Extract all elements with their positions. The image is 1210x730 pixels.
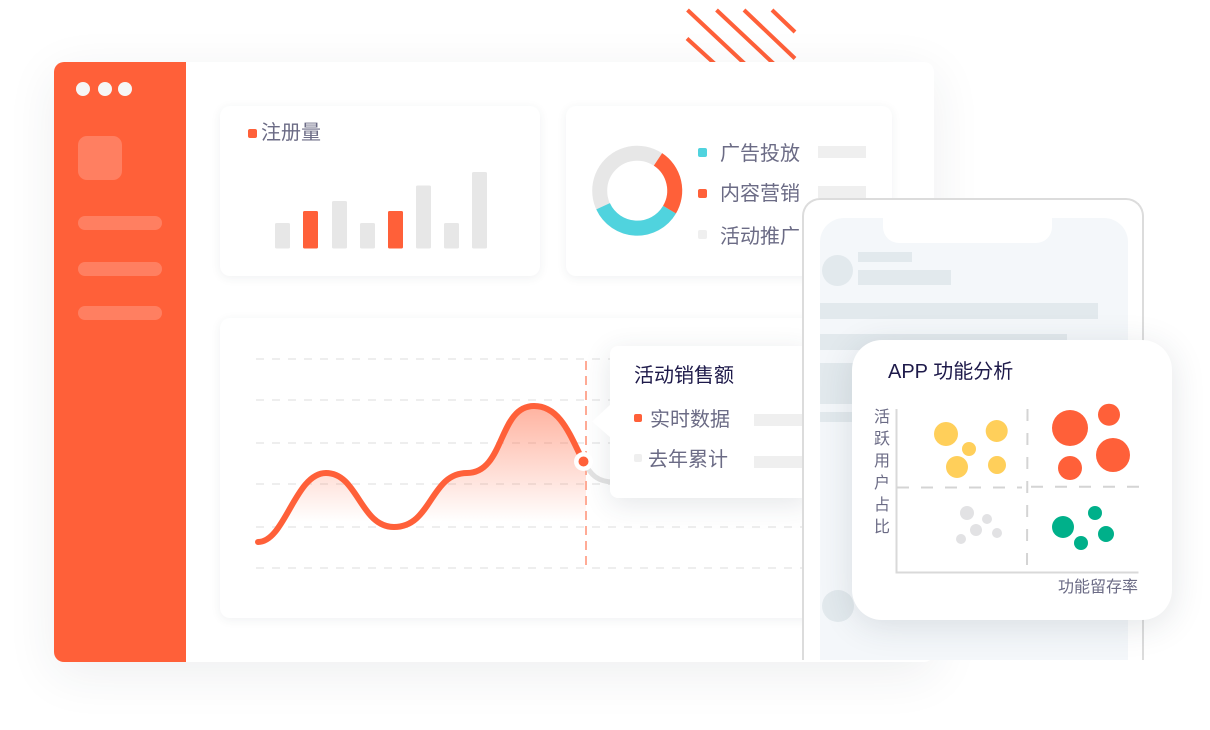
y axis label: 户 — [874, 475, 890, 492]
heading: app feature analysis: APP 功能分析 — [888, 361, 1013, 383]
data point marker — [574, 452, 590, 471]
legend: ad placement: 广告投放 — [720, 143, 800, 165]
panel: sidebar — [54, 62, 186, 662]
panel: sales line chart — [220, 318, 892, 618]
phone mockup — [802, 198, 1144, 660]
sidebar menu item — [78, 306, 162, 320]
sidebar menu item — [78, 262, 162, 276]
tooltip heading: 活动销售额 — [634, 365, 734, 387]
y axis label: 跃 — [874, 431, 890, 448]
phone screen — [820, 218, 1128, 662]
content line placeholder — [820, 303, 1098, 319]
panel: app feature analysis — [852, 340, 1172, 620]
name placeholder — [858, 252, 912, 262]
row: realtime data — [634, 409, 802, 431]
subtitle placeholder — [858, 270, 951, 285]
tooltip pointer — [604, 405, 610, 437]
window control dots — [76, 82, 132, 96]
sidebar menu item — [78, 216, 162, 230]
line chart — [255, 358, 802, 569]
legend: content marketing: 内容营销 — [720, 183, 800, 205]
row: cumulative last year — [634, 449, 802, 471]
content block placeholder — [820, 363, 940, 404]
y axis label: 用 — [874, 453, 890, 470]
legend: ad placement — [698, 143, 866, 165]
panel: channel donut chart — [566, 106, 892, 276]
avatar placeholder — [822, 254, 852, 286]
panel: dashboard window — [54, 62, 934, 662]
x axis label: 功能留存率 — [1058, 579, 1138, 596]
donut chart — [592, 146, 682, 236]
y axis label: 比 — [874, 519, 890, 536]
bubble quadrant chart — [896, 404, 1139, 574]
sidebar logo placeholder — [78, 136, 122, 180]
legend: campaign promotion: 活动推广 — [720, 226, 800, 248]
phone notch — [883, 218, 1052, 243]
legend marker — [248, 129, 257, 138]
content line placeholder — [820, 334, 1067, 350]
panel: registrations bar chart — [220, 106, 540, 276]
content line placeholder — [820, 412, 940, 422]
decorative stripes icon — [686, 8, 796, 62]
y axis label — [874, 408, 890, 536]
bar chart — [275, 172, 487, 248]
row: cumulative last year: 去年累计 — [648, 449, 728, 471]
tooltip: sales detail — [610, 346, 810, 498]
y axis label: 活 — [874, 409, 890, 426]
legend: content marketing — [698, 183, 866, 205]
y axis label: 占 — [874, 497, 890, 514]
heading: registrations: 注册量 — [261, 122, 321, 144]
row: realtime data: 实时数据 — [650, 409, 730, 431]
avatar placeholder — [822, 590, 854, 622]
